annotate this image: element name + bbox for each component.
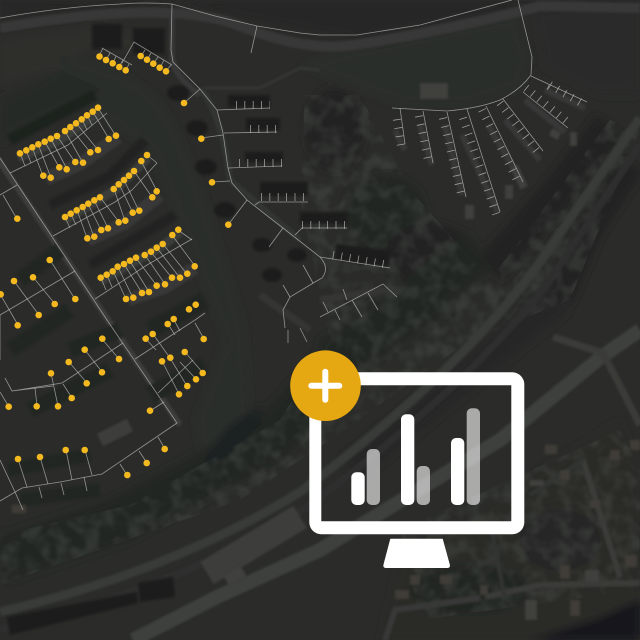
yellow location dots	[0, 53, 232, 478]
network map: drop ticks	[236, 85, 585, 265]
icon: monitor with bar chart	[309, 372, 524, 568]
monitor stand	[383, 539, 450, 568]
network map: cable lines	[0, 0, 587, 510]
monitor frame	[309, 372, 524, 534]
bar chart	[351, 408, 480, 505]
icon: yellow plus badge	[290, 350, 361, 421]
